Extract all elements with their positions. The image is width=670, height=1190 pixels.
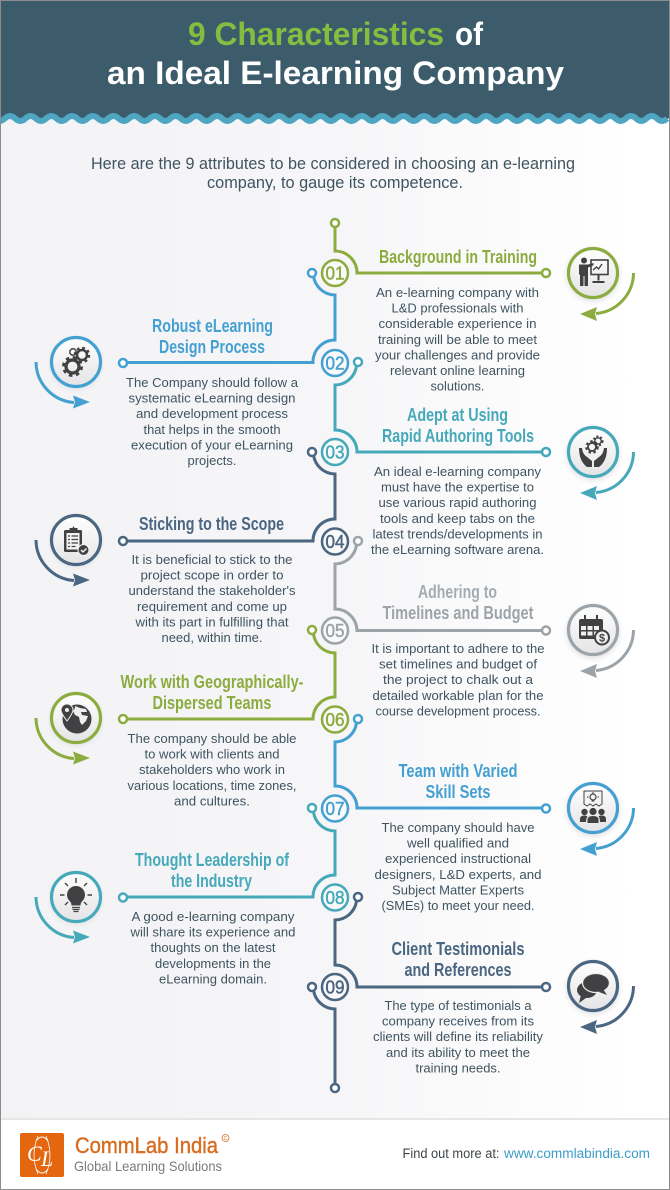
body 01: your challenges and provide [375,347,540,362]
body 01: considerable experience in [378,316,536,331]
connector 07 [335,715,550,812]
panel: 09 Client Testimonials and References [308,893,634,1092]
body 02: execution of your eLearning [131,437,293,452]
title [107,16,564,91]
panel: 08 Thought Leadership of the Industry [36,804,348,986]
panel: 01 Background in Training [322,219,634,394]
heading 09: and References [404,960,512,980]
body 04: need, within time. [162,630,262,645]
logo mark: L [40,1146,53,1171]
body 05: course development process. [376,703,540,718]
panel: 03 Adept at Using Rapid Authoring Tools [322,358,634,557]
body 07: experienced instructional [385,851,531,866]
connector 04 [119,448,335,545]
body 09: company receives from its [382,1014,534,1029]
intro text [91,155,575,192]
connector 06 [119,626,335,723]
heading 06: Work with Geographically- [120,672,304,692]
icon: calendar and dollar [562,601,624,663]
connector 01 [331,219,550,277]
icon: speech bubbles [562,957,624,1019]
number 01: 01 [326,264,344,284]
body 06: various locations, time zones, [128,778,296,793]
body 09: training needs. [416,1060,500,1075]
body 05 [372,641,544,718]
body 02 [126,375,299,468]
heading 03 [382,405,534,446]
title: 9 Characteristics [188,16,444,52]
body 08: A good e-learning company [132,909,295,924]
body 04: understand the stakeholder's [128,583,296,598]
body 02: projects. [188,453,236,468]
arrow 07 [580,808,634,856]
body 02: The Company should follow a [126,375,299,390]
body 05: detailed workable plan for the [372,688,544,703]
connector 09 [308,893,550,1092]
body 04: with its part in fulfilling that [135,614,289,629]
heading 08 [135,850,290,891]
footer link: www.commlabindia.com [503,1146,650,1161]
body 06: The company should be able [128,731,296,746]
panel: 04 Sticking to the Scope [36,448,348,645]
number 02 [322,350,348,376]
body 01 [375,285,540,394]
number 03: 03 [326,442,344,462]
number 06: 06 [326,710,344,730]
body 04 [128,552,296,645]
body 03: use various rapid authoring [378,495,536,510]
heading 04: Sticking to the Scope [139,514,284,534]
body 09: The type of testimonials a [384,998,532,1013]
number 09 [322,974,348,1000]
body 01: An e-learning company with [376,285,539,300]
body 06: to work with clients and [144,747,280,762]
body 08: will share its experience and [130,925,296,940]
heading 06 [120,672,304,713]
number 09: 09 [326,978,344,998]
number 06 [322,706,348,732]
connector 02 [119,269,335,367]
connector 08 [119,804,335,902]
body 06: stakeholders who work in [139,762,285,777]
body 05: It is important to adhere to the [372,641,544,656]
number 05: 05 [326,621,344,641]
heading 01: Background in Training [379,247,537,267]
footer [0,1118,670,1190]
arrow 09 [580,986,634,1034]
arrow 04 [36,540,90,586]
body 08: eLearning domain. [159,971,267,986]
body 02: systematic eLearning design [128,391,296,406]
logo mark: C [27,1141,42,1166]
intro text: company, to gauge its competence. [207,174,463,192]
body 06: and cultures. [174,793,250,808]
body 04: It is beneficial to stick to the [132,552,292,567]
body 03: the eLearning software arena. [371,542,544,557]
icon: hands holding gears [562,423,624,485]
icon: light bulb [45,868,107,930]
heading 05: Timelines and Budget [382,603,534,623]
body 09 [373,998,543,1075]
heading 08: Thought Leadership of [135,850,290,870]
heading 02 [152,316,273,357]
icon: globe with pin [45,689,107,751]
body 07: Subject Matter Experts [392,882,524,897]
heading 07 [398,761,518,802]
number 04: 04 [326,532,344,552]
number 02: 02 [326,354,344,374]
number 08: 08 [326,888,344,908]
number 05 [322,618,348,644]
heading 05: Adhering to [418,582,497,602]
body 04: project scope in order to [140,568,284,583]
body 05: set timelines and budget of [379,657,537,672]
panel: 05 Adhering to Timelines and Budget [322,537,634,718]
body 08 [130,909,296,986]
body 07: well qualified and [406,836,509,851]
body 01: solutions. [430,379,484,394]
body 08: developments in the [155,956,271,971]
body 03: An ideal e-learning company [374,464,541,479]
heading 06: Dispersed Teams [152,693,272,713]
heading 02: Design Process [159,337,265,357]
arrow 08 [36,897,90,944]
heading 09: Client Testimonials [392,939,524,959]
heading 03: Adept at Using [407,405,508,425]
heading 08: the Industry [171,871,252,891]
number 07: 07 [326,799,344,819]
panel: 02 Robust eLearning Design Process [36,269,348,468]
icon: gears [45,333,107,395]
heading 02: Robust eLearning [152,316,273,336]
panel: 07 Team with Varied Skill Sets [322,715,634,913]
header banner [0,0,670,121]
number 04 [322,528,348,554]
footer link: Find out more at: [402,1146,500,1161]
number 03 [322,439,348,465]
body 04: requirement and come up [137,599,287,614]
arrow 03 [580,452,634,500]
arrow 06 [36,718,90,764]
body 09: and its ability to meet the [386,1045,530,1060]
logo wordmark: CommLab India [75,1133,219,1158]
icon: presenter at board [562,244,624,306]
body 03: must have the expertise to [381,480,534,495]
body 03 [371,464,544,557]
icon: clipboard checklist [45,511,107,573]
body 02: and development process [136,406,288,421]
body 07: (SMEs) to meet your need. [382,898,534,913]
heading 03: Rapid Authoring Tools [382,426,534,446]
arrow 05 [580,630,634,678]
panel: 06 Work with Geographically-Dispersed Teams [36,626,348,808]
body 01: training will be able to meet [378,332,537,347]
heading 09 [392,939,524,980]
title: of [455,16,483,52]
body 03: tools and keep tabs on the [380,511,535,526]
intro text: Here are the 9 attributes to be considered in choosing an e-learning [91,155,575,173]
logo wordmark: C [224,1136,228,1142]
arrow 01 [580,273,634,321]
logo mark [20,1133,64,1177]
icon: team with idea bubble [562,779,624,841]
body 05: the project to chalk out a [383,672,534,687]
body 01: relevant online learning [390,363,525,378]
logo wordmark [74,1133,229,1174]
body 01: L&D professionals with [392,301,524,316]
icon: calendar and dollar: $ [599,632,605,644]
body 08: thoughts on the latest [150,940,276,955]
connector 03 [335,358,550,456]
number 01 [322,260,348,286]
body 07: designers, L&D experts, and [374,867,542,882]
body 07 [374,820,542,913]
body 03: latest trends/developments in [372,526,542,541]
logo wordmark: Global Learning Solutions [74,1158,222,1174]
heading 05 [382,582,534,623]
body 09: clients will define its reliability [373,1029,543,1044]
footer link [402,1146,650,1161]
connector 05 [335,537,550,634]
body 06 [128,731,296,808]
number 07 [322,796,348,822]
title: an Ideal E-learning Company [107,55,564,91]
number 08 [322,884,348,910]
heading 07: Skill Sets [426,782,490,802]
body 02: that helps in the smooth [144,422,280,437]
arrow 02 [36,362,90,408]
body 07: The company should have [382,820,534,835]
heading 07: Team with Varied [398,761,518,781]
